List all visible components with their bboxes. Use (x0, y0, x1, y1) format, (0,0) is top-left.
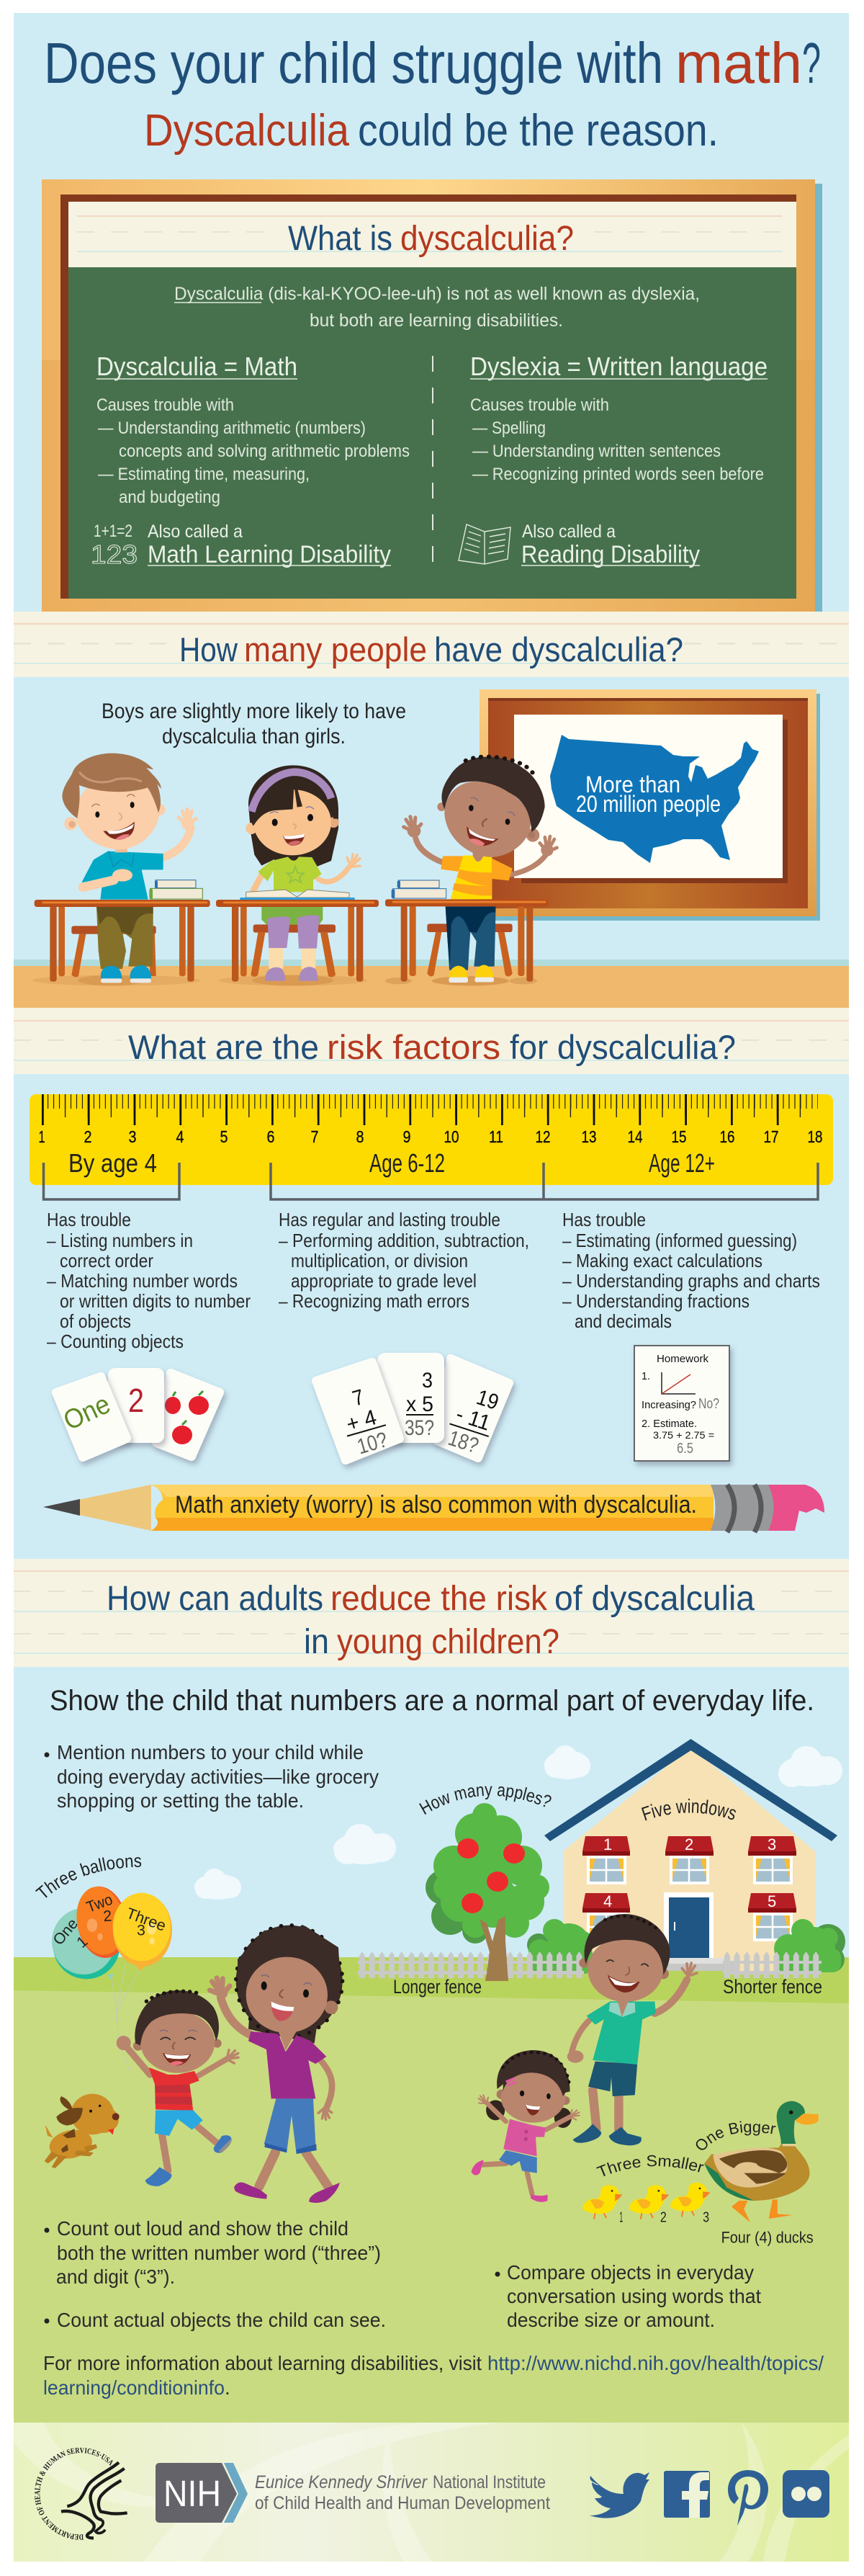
text: boys more likely: dyscalculia than girls. (162, 725, 346, 748)
text: more than 20 million (576, 772, 721, 817)
column: dyscalculia = math: and budgeting (119, 488, 220, 507)
list: by age 4: – Listing numbers in (47, 1230, 193, 1251)
age labels: Age 6-12 (369, 1148, 445, 1178)
panel: risk factors (14, 1008, 849, 1532)
ruler numbers: 13 (582, 1127, 596, 1146)
books on desk 3 (392, 880, 446, 898)
heading: what is dyscalculia: What is (288, 220, 392, 258)
labels: fences: Shorter fence (723, 1976, 822, 1998)
homework sheet: Homework (657, 1353, 708, 1365)
floor and baseboard (14, 960, 849, 1008)
column: dyscalculia = math: Causes trouble with (96, 395, 234, 415)
windows: 2 (685, 1835, 693, 1853)
windows: 4 (603, 1892, 612, 1910)
flash cards: arithmetic: - 11 (453, 1403, 493, 1436)
text: math anxiety: Math anxiety (worry) is also common with dyscalculia. (175, 1491, 697, 1519)
books on desk 1 (149, 880, 202, 899)
age labels (68, 1148, 715, 1178)
house (544, 1739, 837, 1971)
list: age 12+: – Making exact calculations (562, 1250, 762, 1271)
bullets: count out loud: and digit (“3”). (56, 2266, 175, 2288)
balloon labels: 3 (137, 1922, 145, 1939)
icon: chalk book (459, 524, 510, 564)
heading band: how many people: have dyscalculia? (434, 630, 683, 668)
wall board with US map (480, 689, 820, 921)
ruler numbers: 2 (84, 1127, 92, 1146)
list: by age 4: correct order (60, 1250, 153, 1271)
list: by age 4: of objects (60, 1310, 131, 1332)
list: age 6-12: Has regular and lasting trouble (279, 1209, 500, 1230)
column: dyscalculia = math (91, 352, 410, 569)
flash cards: arithmetic: 3 (422, 1369, 433, 1392)
homework sheet: 6.5 (677, 1441, 693, 1457)
flash cards: arithmetic (316, 1353, 509, 1461)
labels: fences (393, 1976, 822, 1998)
flash cards: number words: 2 (128, 1382, 144, 1419)
mallard duck (704, 2101, 819, 2222)
illustration: balloons, boy, woman and dog (35, 1857, 344, 2203)
bushes (527, 1919, 845, 1974)
text: institute name: of Child Health and Human Development (255, 2493, 550, 2513)
column: dyslexia = written language: Dyslexia = Written language (470, 352, 768, 381)
column: dyscalculia = math: Math Learning Disability (148, 541, 391, 568)
more information text (43, 2352, 824, 2399)
desk 3 (385, 899, 549, 982)
logo: NIH: NIH (163, 2473, 221, 2514)
pencil: math anxiety (43, 1485, 824, 1532)
bullet: compare objects: conversation using words that (507, 2285, 761, 2307)
balloon labels: Two (84, 1891, 114, 1916)
woman (207, 1926, 343, 2203)
column: dyslexia = written language (459, 352, 768, 568)
door (644, 1892, 738, 1971)
ducklings: 1 (619, 2209, 623, 2225)
homework sheet: 3.75 + 2.75 = (653, 1429, 714, 1441)
labels: ducks: One Bigger (696, 2121, 776, 2150)
ruler numbers: 6 (266, 1127, 275, 1146)
icon: pinterest (728, 2470, 768, 2526)
flash cards: number words (56, 1368, 220, 1457)
label: three balloons: Three balloons (35, 1857, 141, 1897)
illustration: man, girl and ducks (471, 1914, 819, 2246)
column: dyslexia = written language: Causes trouble with (470, 395, 609, 415)
list: age 6-12: – Recognizing math errors (279, 1290, 469, 1312)
heading band: how many people (14, 612, 849, 677)
ruler numbers (39, 1127, 822, 1146)
list: age 12+: – Estimating (informed guessing) (562, 1230, 797, 1251)
bullets: count out loud: Count actual objects the child can see. (57, 2309, 386, 2331)
ruler numbers: 8 (356, 1127, 364, 1146)
list: age 12+: – Understanding graphs and charts (562, 1270, 820, 1292)
balloon labels: 1 (73, 1933, 91, 1951)
heading band: risk factors (14, 1008, 849, 1074)
list: age 6-12: appropriate to grade level (291, 1270, 477, 1292)
list: age 6-12: multiplication, or division (291, 1250, 468, 1271)
icon: chalk numbers: 1+1=2 (94, 522, 132, 541)
boy with balloons (117, 1990, 241, 2186)
text: institute name: National Institute (433, 2472, 546, 2492)
label: how many apples: How many apples? (419, 1786, 552, 1815)
ducklings (582, 2183, 710, 2225)
bullet: compare objects (495, 2261, 761, 2331)
ruler numbers: 4 (176, 1127, 184, 1146)
open book (240, 890, 355, 900)
illustration: boy and girl at desks (32, 753, 379, 985)
ruler numbers: 9 (403, 1127, 410, 1146)
heading band: reduce the risk: young children? (337, 1623, 559, 1661)
bullets: count out loud: both the written number word (“three”) (57, 2242, 381, 2264)
desk 1 (35, 900, 210, 982)
fences (358, 1945, 822, 1981)
more information text: learning/conditioninfo (43, 2376, 225, 2399)
column: dyscalculia = math: Dyscalculia = Math (96, 352, 297, 381)
icon: chalk numbers: 123 (91, 540, 138, 569)
more information text: . (225, 2376, 230, 2399)
heading band: risk factors: risk factors (327, 1028, 500, 1066)
logo: NIH (156, 2463, 248, 2523)
map: United States (550, 735, 759, 863)
ruler numbers: 18 (808, 1127, 822, 1146)
labels: ducks: Three Smaller (596, 2155, 704, 2177)
title: Dyscalculia (144, 106, 349, 156)
subheading: show the child: Show the child that numbers are a normal part of everyday life. (50, 1685, 814, 1717)
windows: 5 (768, 1892, 776, 1910)
balloons (50, 1882, 172, 1980)
text: institute name: Eunice Kennedy Shriver (255, 2472, 428, 2492)
ruler numbers: 3 (128, 1127, 137, 1146)
flash cards: arithmetic: + 4 (343, 1405, 379, 1436)
bullets: count out loud: Count out loud and show the child (57, 2217, 348, 2240)
ruler numbers: 11 (489, 1127, 503, 1146)
heading band: reduce the risk: in (304, 1623, 329, 1661)
ground (14, 1957, 849, 2423)
homework sheet: Increasing? (642, 1399, 696, 1411)
column: dyslexia = written language: — Recognizing printed words seen before (472, 465, 764, 484)
ducklings: 3 (703, 2209, 709, 2225)
title: math (675, 31, 802, 95)
bullet: compare objects: describe size or amount. (507, 2309, 715, 2331)
column: dyslexia = written language: Also called a (522, 522, 616, 542)
homework sheet: 2. Estimate. (642, 1418, 697, 1430)
ruler numbers: 17 (763, 1127, 779, 1146)
column: dyscalculia = math: — Estimating time, measuring, (98, 465, 310, 484)
list: age 12+ (562, 1209, 820, 1332)
ruler numbers: 5 (220, 1127, 228, 1146)
list: by age 4: – Counting objects (47, 1331, 184, 1352)
balloon labels: Three (124, 1905, 168, 1935)
logo: HHS: DEPARTMENT OF HEALTH & HUMAN SERVICES·USA (35, 2448, 112, 2540)
ruler numbers: 10 (444, 1127, 459, 1146)
intro text: but both are learning disabilities. (310, 310, 563, 331)
labels: ducks (596, 2121, 814, 2246)
list: age 6-12 (279, 1209, 529, 1312)
man (567, 1914, 699, 2145)
heading band: reduce the risk: of dyscalculia (554, 1580, 755, 1618)
apples (165, 1391, 209, 1444)
illustration: third student at desk (385, 757, 559, 985)
bullet: mention numbers (45, 1741, 379, 1812)
heading band: risk factors: for dyscalculia? (510, 1028, 736, 1066)
heading band: how many people: many people (244, 630, 427, 668)
ruler numbers: 15 (671, 1127, 687, 1146)
balloon labels (50, 1891, 168, 1951)
heading band: reduce the risk: How can adults (107, 1580, 323, 1618)
ducklings: 2 (660, 2209, 667, 2225)
windows (582, 1835, 796, 1941)
flash cards: arithmetic: x 5 (406, 1392, 433, 1416)
more information text: For more information about learning disabilities, visit (43, 2352, 482, 2374)
column: dyscalculia = math: concepts and solving arithmetic problems (119, 442, 410, 461)
heading band: how many people: How (179, 630, 238, 668)
text: institute name (255, 2472, 550, 2513)
floor shadows (32, 975, 367, 985)
ruler (30, 1094, 833, 1185)
footer panel (14, 2423, 849, 2562)
balloon strings (112, 1962, 139, 2075)
ruler numbers: 7 (311, 1127, 318, 1146)
column: dyslexia = written language: — Spelling (472, 419, 546, 438)
windows: 3 (768, 1835, 776, 1853)
ruler numbers: 14 (628, 1127, 643, 1146)
labels: ducks: Four (4) ducks (721, 2229, 814, 2246)
heading band: reduce the risk (14, 1559, 849, 1667)
list: age 12+: Has trouble (562, 1209, 646, 1230)
bullet: mention numbers: doing everyday activities—like grocery (57, 1766, 379, 1788)
bullet: compare objects: Compare objects in everyday (507, 2261, 754, 2284)
flash cards: number words: One (59, 1389, 115, 1436)
title: ? (802, 31, 821, 95)
column: dyslexia = written language: — Understanding written sentences (472, 442, 721, 461)
balloon labels: 2 (102, 1907, 112, 1925)
age labels: Age 12+ (649, 1148, 715, 1178)
panel: how can adults reduce the risk (14, 1559, 849, 2423)
title (44, 31, 821, 156)
ruler numbers: 12 (536, 1127, 550, 1146)
homework sheet: 1. (642, 1370, 650, 1382)
apples on tree (457, 1838, 525, 1913)
column: dyscalculia = math: — Understanding arithmetic (numbers) (98, 419, 366, 438)
heading: what is dyscalculia: dyscalculia? (400, 220, 574, 258)
ruler numbers: 16 (720, 1127, 734, 1146)
intro text: Dyscalculia (dis-kal-KYOO-lee-uh) is not as well known as dyslexia, (174, 284, 700, 304)
homework sheet (634, 1346, 729, 1461)
list: age 12+: and decimals (575, 1310, 672, 1332)
list: by age 4 (47, 1209, 251, 1352)
homework sheet: No? (698, 1396, 719, 1412)
list: by age 4: – Matching number words (47, 1270, 238, 1292)
title: Does your child struggle with (44, 31, 663, 95)
column: dyscalculia = math: Also called a (148, 522, 243, 542)
panel: what is dyscalculia chalkboard (42, 179, 822, 612)
intro text (174, 284, 700, 331)
heading band: reduce the risk: reduce the risk (330, 1580, 548, 1618)
label: five windows: Five windows (641, 1798, 736, 1821)
more information text: http://www.nichd.nih.gov/health/topics/ (487, 2352, 824, 2374)
icon: twitter (590, 2472, 649, 2518)
age labels: By age 4 (68, 1148, 157, 1178)
dog (45, 2094, 120, 2168)
balloon labels: One (50, 1915, 81, 1949)
brackets (43, 1163, 818, 1199)
heading band: risk factors: What are the (128, 1028, 319, 1066)
text: more than 20 million: 20 million people (576, 791, 721, 817)
list: by age 4: Has trouble (47, 1209, 131, 1230)
text: boys more likely (102, 699, 406, 748)
tree with apples (419, 1786, 552, 1981)
flash cards: arithmetic: 10? (354, 1428, 390, 1459)
panel: how many people have dyscalculia (14, 612, 849, 1008)
text: more than 20 million: More than (585, 772, 680, 797)
flash cards: arithmetic: 7 (350, 1385, 366, 1411)
heading: what is dyscalculia (288, 220, 574, 258)
girl (246, 765, 364, 981)
labels: fences: Longer fence (393, 1976, 482, 1998)
list: by age 4: or written digits to number (60, 1290, 251, 1312)
girl (471, 2050, 582, 2202)
bullets: count out loud (45, 2217, 386, 2331)
bullet: mention numbers: Mention numbers to your child while (57, 1741, 364, 1763)
ruler numbers: 1 (39, 1127, 45, 1146)
bullet: mention numbers: shopping or setting the table. (57, 1789, 304, 1812)
desk 2 (216, 900, 379, 982)
icon: chalk numbers (91, 522, 138, 569)
boy (62, 753, 197, 983)
flash cards: arithmetic: 18? (445, 1426, 482, 1458)
list: age 12+: – Understanding fractions (562, 1290, 750, 1312)
text: boys more likely: Boys are slightly more likely to have (102, 699, 406, 723)
clouds (194, 1745, 842, 1900)
icon: facebook (664, 2471, 710, 2518)
icon: flickr (783, 2470, 829, 2518)
windows: 1 (603, 1835, 612, 1853)
flash cards: arithmetic: 35? (405, 1416, 434, 1440)
column: dyslexia = written language: Reading Disability (521, 541, 700, 568)
list: age 6-12: – Performing addition, subtraction, (279, 1230, 529, 1251)
title: could be the reason. (358, 106, 719, 156)
flash cards: arithmetic: 19 (474, 1385, 502, 1415)
